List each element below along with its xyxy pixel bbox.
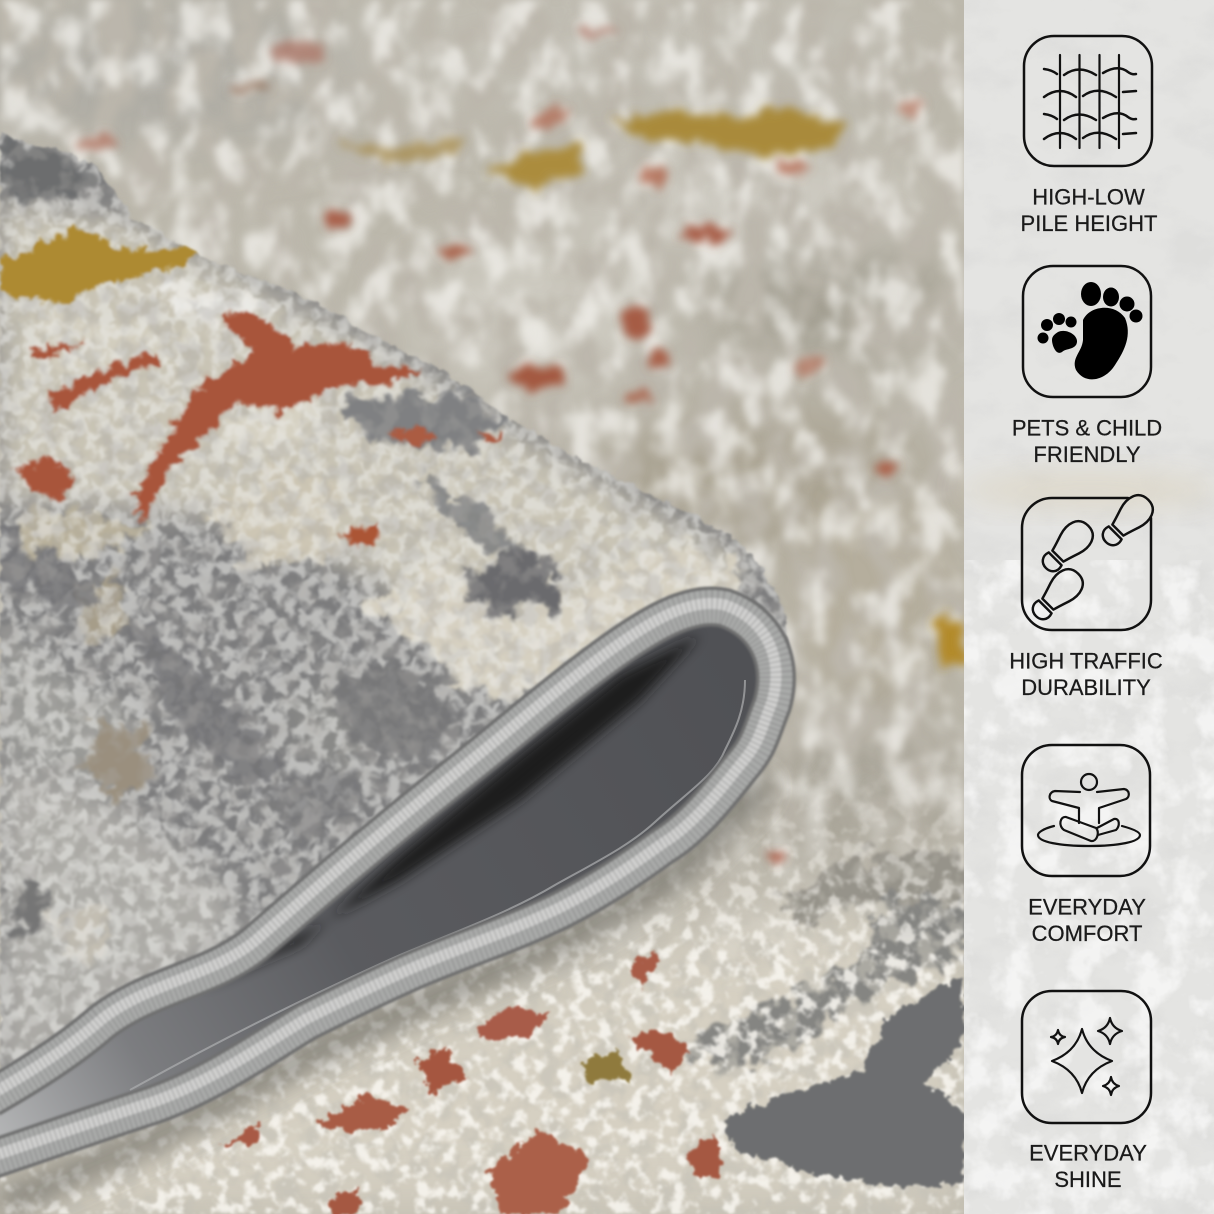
label: pets and child friendly: PETS & CHILD (1012, 416, 1162, 440)
rug photo: floor pile background (0, 0, 970, 1214)
rug bound edge (0, 603, 776, 1160)
folded rug top surface (0, 100, 800, 1100)
label: everyday shine: SHINE (1054, 1167, 1122, 1192)
fold rust motif (0, 228, 505, 550)
icon: sparkles (1022, 991, 1151, 1123)
right panel background (960, 0, 1214, 1214)
floor foreground cream pile (0, 760, 964, 1214)
floor foreground grey patches (690, 850, 964, 1075)
floor dark grey patch (725, 975, 964, 1185)
label: high-low pile height: PILE HEIGHT (1021, 211, 1157, 236)
floor shadow under fold (0, 780, 765, 1205)
label: high-low pile height: HIGH-LOW (1032, 184, 1145, 210)
label: pets and child friendly: FRIENDLY (1033, 442, 1141, 467)
label: everyday comfort: EVERYDAY (1028, 894, 1146, 920)
label: high traffic durability: DURABILITY (1021, 675, 1151, 700)
icon: pile lines (1024, 36, 1152, 166)
underside opening shadow (238, 634, 699, 980)
feature: high-low pile height (1021, 36, 1157, 236)
floor rust and gold accents (80, 27, 964, 861)
rug underside (0, 606, 776, 1160)
feature: everyday shine (1022, 991, 1151, 1192)
fold cream patches (10, 280, 750, 960)
icon: footprints (1022, 489, 1159, 630)
label: everyday comfort: COMFORT (1032, 921, 1142, 946)
fold dark grey patches (0, 140, 560, 935)
feature: pets and child friendly (1012, 266, 1162, 467)
label: everyday shine: EVERYDAY (1029, 1140, 1147, 1166)
feature: everyday comfort (1022, 745, 1150, 946)
icon: paw and foot (1023, 266, 1151, 397)
fold gold motif (0, 228, 215, 305)
icon: seated figure (1022, 745, 1150, 876)
feature: high traffic durability (1009, 489, 1163, 700)
label: high traffic durability: HIGH TRAFFIC (1009, 648, 1163, 674)
